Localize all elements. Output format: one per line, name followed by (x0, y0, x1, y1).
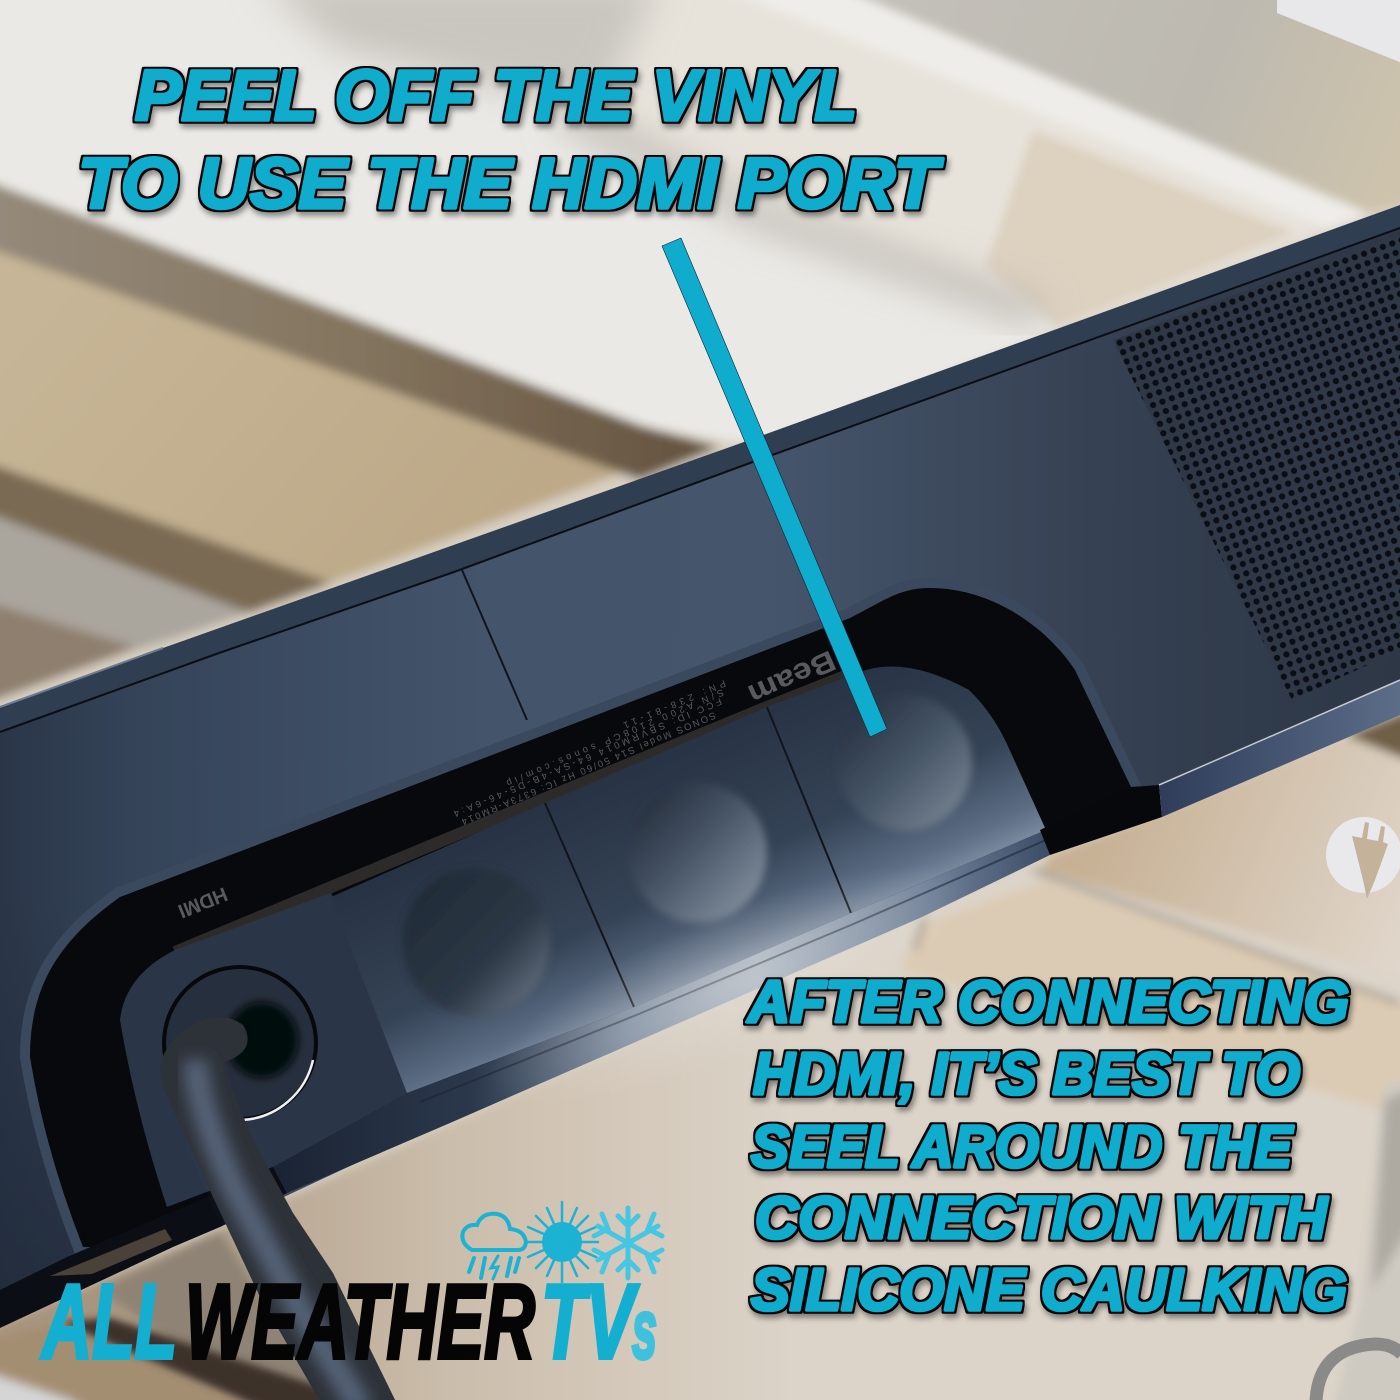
textured edge of label strip (175, 670, 860, 952)
text block: silicone caulking advice (746, 969, 1349, 1323)
small printed label text: SONOS Model S14 50/60 Hz IC: 6373A-RM014 (460, 709, 717, 827)
logo: All Weather TVs (40, 1202, 662, 1381)
icon: plug sticker on box (1326, 817, 1400, 899)
logo wordmark: ALL: ALL (40, 1263, 177, 1381)
small printed label text: S/N A200 2108CP sonos.com/ip (505, 686, 725, 788)
icon: white paper corner (1277, 0, 1400, 63)
text block: silicone caulking advice: SEEL AROUND THE (751, 1114, 1294, 1180)
text block: silicone caulking advice: HDMI, IT’S BEST TO (753, 1041, 1300, 1107)
front edge highlight (1159, 680, 1400, 785)
heading: peel off the vinyl: PEEL OFF THE VINYL (135, 57, 857, 136)
slate front edge section (1159, 680, 1400, 817)
vinyl seam lines (462, 570, 851, 1007)
lip line (420, 840, 1046, 1102)
cable ring bottom right (1316, 1344, 1400, 1400)
speaker grille (1113, 233, 1400, 700)
recess in the back of the soundbar (30, 588, 1131, 1247)
port cover left (402, 868, 550, 1016)
small printed label text: Beam (743, 644, 840, 710)
cable port (162, 965, 318, 1121)
haze on soundbar lower edge (463, 819, 997, 1151)
logo wordmark: WEATHER: WEATHER (185, 1263, 535, 1381)
logo wordmark: s: s (632, 1282, 657, 1376)
text block: silicone caulking advice: AFTER CONNECTING (746, 969, 1349, 1035)
icon: snowflake (594, 1208, 662, 1278)
text block: silicone caulking advice: CONNECTION WITH (755, 1185, 1328, 1251)
heading: peel off the vinyl (78, 57, 944, 224)
darkened left end (0, 900, 83, 1300)
heading: peel off the vinyl: TO USE THE HDMI PORT (78, 145, 944, 224)
soundbar top lip (0, 205, 1400, 732)
lip shadow line (0, 228, 1400, 732)
lower lip below panel (273, 830, 1050, 1193)
small printed label text: PN: 238-81-11 (622, 677, 727, 730)
small printed label text (175, 644, 840, 922)
connection pad (120, 893, 450, 1207)
black front edge section (1040, 785, 1162, 855)
dark wedge shadow lower left (60, 1318, 340, 1400)
soundbar main face (0, 228, 1400, 1300)
port cover right (838, 695, 972, 831)
gloss reflection (50, 1229, 172, 1276)
port cover middle (629, 783, 767, 923)
lip highlight (0, 648, 163, 707)
icon: sun (526, 1202, 598, 1282)
logo wordmark: TV: TV (541, 1263, 640, 1381)
vinyl-covered ports panel (331, 666, 1046, 1093)
power cable (160, 1017, 400, 1400)
soft shadow on top surface (260, 0, 660, 110)
icon: rain cloud (462, 1214, 526, 1279)
arrow: pointer line to HDMI port (662, 238, 887, 737)
small printed label text: FCC ID: SBVRM014 64-SA-4B-D5-46-6A:4 (452, 695, 723, 819)
text block: silicone caulking advice: SILICONE CAULKING (751, 1257, 1347, 1323)
small printed label text: HDMI (175, 882, 230, 922)
left gloss band (0, 1167, 287, 1328)
